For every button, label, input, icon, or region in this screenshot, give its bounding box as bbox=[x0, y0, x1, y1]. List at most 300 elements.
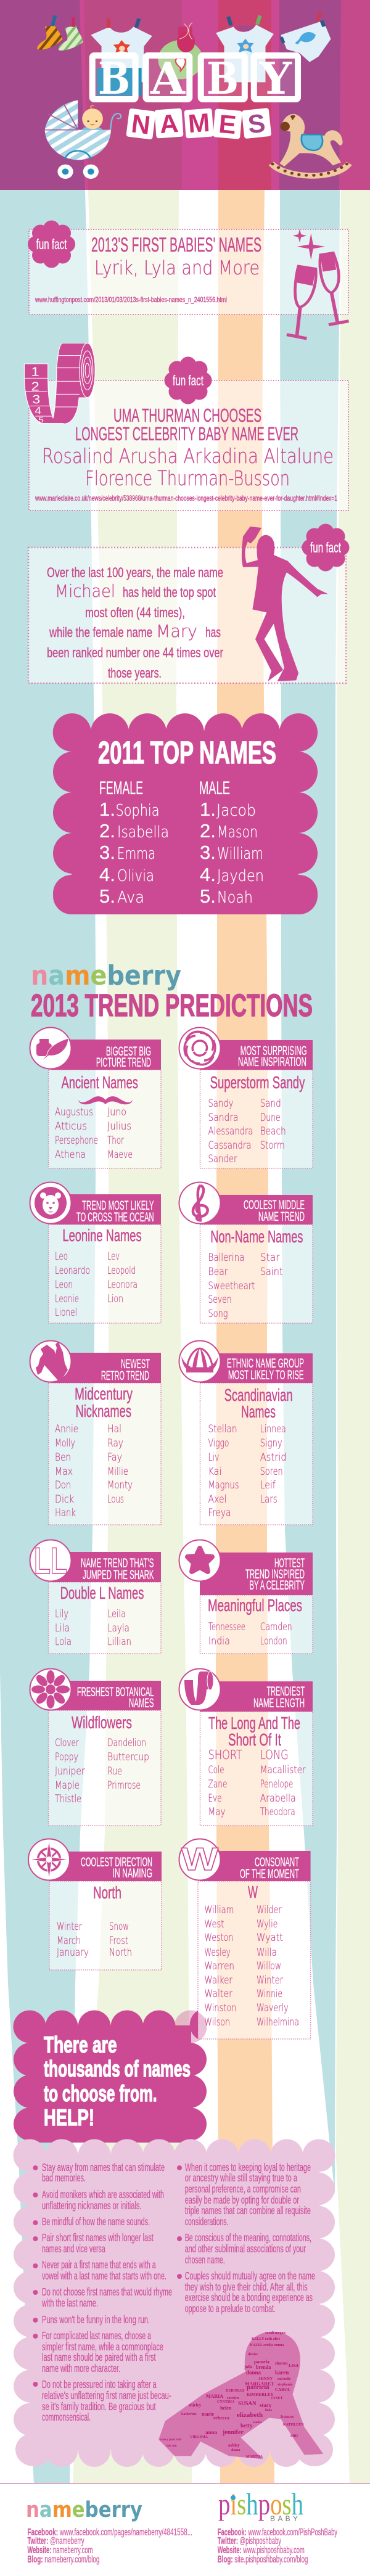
text: help message: There are bbox=[44, 2032, 117, 2057]
list: W names: Wilson bbox=[204, 2016, 230, 2028]
text: banner title: NAME INSPIRATION bbox=[238, 1055, 306, 1069]
heading: wildflowers: Wildflowers bbox=[72, 1713, 132, 1732]
list: non-name names bbox=[208, 1252, 283, 1320]
list: tips left column: last name should be paired with a first bbox=[42, 2351, 156, 2363]
list: leonine names: Leo bbox=[55, 1250, 68, 1263]
list: short and long names: Eve bbox=[208, 1792, 222, 1805]
list: midcentury names: Hal bbox=[107, 1423, 121, 1435]
text: banner title bbox=[96, 1044, 151, 1070]
icon: star bbox=[179, 1540, 221, 1581]
list: tips left column: vowel with a last name that starts with one. bbox=[42, 2270, 166, 2282]
icon: crawling baby word cloud bbox=[158, 2331, 323, 2459]
icon: crawling baby word cloud: julie bbox=[244, 2365, 252, 2369]
text: banner title: BY A CELEBRITY bbox=[249, 1578, 305, 1593]
panel: hottest trend inspired by a celebrity bbox=[179, 1540, 313, 1654]
list: leonine names: Leonardo bbox=[55, 1265, 90, 1277]
heading: scandinavian names bbox=[224, 1385, 293, 1421]
heading: meaningful places: Meaningful Places bbox=[208, 1596, 302, 1615]
text: name fact: most often (44 times), bbox=[85, 605, 185, 620]
icon: tape measure: 4 bbox=[35, 404, 41, 416]
panel: freshest botanical names bbox=[30, 1668, 161, 1826]
list: female names: Sophia bbox=[116, 802, 159, 820]
icon: crawling baby word cloud: sarah megan bbox=[265, 2331, 286, 2335]
list: double l names: Leila bbox=[107, 1608, 126, 1620]
icon: crawling baby word cloud: carolyn bbox=[227, 2397, 239, 2400]
panel: 2011 top names bbox=[53, 713, 318, 914]
list: short and long names: Theodora bbox=[260, 1806, 295, 1818]
panel: fun fact longest name bbox=[29, 356, 348, 511]
panel: help callout bbox=[14, 2010, 207, 2143]
text: banner title: RETRO TREND bbox=[101, 1369, 149, 1383]
heading: double l names: Double L Names bbox=[60, 1583, 144, 1602]
heading: 2011 top names: 2011 TOP NAMES bbox=[98, 735, 276, 770]
list: male names: 4. bbox=[200, 864, 216, 885]
list: tips right column: chosen name. bbox=[185, 2254, 225, 2266]
list: W names: Weston bbox=[204, 1932, 233, 1944]
icon: crawling baby word cloud: KIMBERLEY bbox=[247, 2392, 274, 2397]
icon: crawling baby word cloud: MARGARET bbox=[245, 2381, 274, 2387]
list: ancient names: Atticus bbox=[55, 1120, 87, 1133]
list: tips left column: names and vice versa bbox=[42, 2242, 105, 2255]
list: tips right column: considerations. bbox=[185, 2215, 228, 2228]
heading: ancient names: Ancient Names bbox=[62, 1073, 138, 1092]
list: scandinavian names: Signy bbox=[260, 1437, 282, 1450]
list: male names: 5. bbox=[200, 885, 216, 907]
list: W names: Walker bbox=[204, 1974, 232, 1987]
icon: crawling baby word cloud: patricia bbox=[247, 2384, 269, 2391]
icon: crawling baby word cloud: elizabeth bbox=[237, 2411, 263, 2419]
list: leonine names: Leon bbox=[55, 1279, 73, 1291]
list: male names: Jayden bbox=[217, 867, 264, 885]
list: W names: Walter bbox=[204, 1988, 232, 2000]
list: tips left column: Stay away from names that can stimulate bbox=[42, 2161, 165, 2173]
text: banner title: COOLEST MIDDLE bbox=[244, 1198, 305, 1212]
icon: horse and rider bbox=[30, 1340, 72, 1382]
text: nameberry links: Facebook: www.facebook.com/pages/nameberry/4841558... bbox=[27, 2527, 192, 2538]
text: banner title: FRESHEST BOTANICAL bbox=[77, 1685, 154, 1699]
list: midcentury names: Fay bbox=[107, 1451, 122, 1464]
text: banner title: COOLEST DIRECTION bbox=[81, 1855, 152, 1869]
text: nameberry links: Twitter: @nameberry bbox=[27, 2536, 84, 2546]
text: banner title: CONSONANT bbox=[255, 1855, 299, 1869]
list: double l names: Lila bbox=[55, 1622, 70, 1635]
list: tips left column: Puns won't be funny in the long run. bbox=[42, 2313, 150, 2326]
list: tips right column bbox=[177, 2161, 315, 2315]
list: scandinavian names: Liv bbox=[208, 1451, 220, 1464]
icon: crawling baby word cloud: linda bbox=[265, 2409, 272, 2412]
list: short and long names: Arabella bbox=[260, 1792, 296, 1805]
title: NAMES tiles: E bbox=[218, 109, 237, 139]
text: banner title bbox=[76, 1199, 154, 1224]
list: ancient names bbox=[55, 1106, 133, 1161]
text: banner title: PICTURE TREND bbox=[96, 1056, 151, 1070]
list: female names: Emma bbox=[117, 845, 155, 863]
list: female names: Olivia bbox=[117, 867, 154, 885]
icon: storm spiral bbox=[179, 1027, 221, 1069]
heading: leonine names: Leonine Names bbox=[62, 1226, 142, 1245]
list: midcentury names: Hank bbox=[55, 1507, 76, 1519]
heading: midcentury nicknames: Midcentury bbox=[75, 1384, 133, 1403]
icon: fun fact badge bbox=[164, 356, 212, 404]
list: ancient names: Maeve bbox=[107, 1149, 133, 1161]
list: midcentury names bbox=[55, 1423, 133, 1519]
list: scandinavian names: Axel bbox=[208, 1493, 227, 1506]
list: storm names bbox=[208, 1097, 286, 1165]
list: north names: Snow bbox=[109, 1921, 129, 1933]
text: help message: to choose from. bbox=[44, 2081, 157, 2106]
text: banner title: OF THE MOMENT bbox=[240, 1867, 299, 1881]
text: help message: HELP! bbox=[44, 2105, 94, 2130]
list: female names: FEMALE bbox=[99, 778, 143, 798]
icon: crawling baby word cloud: betty bbox=[240, 2422, 253, 2429]
list: leonine names: Lion bbox=[107, 1293, 123, 1305]
icon: lion bbox=[30, 1183, 72, 1223]
list: ancient names: Persephone bbox=[55, 1134, 98, 1147]
icon: t-shirts, bib and diaper bbox=[91, 12, 331, 96]
icon: tape measure: 5 bbox=[38, 416, 44, 425]
list: male names: Jacob bbox=[216, 802, 256, 820]
list: scandinavian names: Soren bbox=[260, 1466, 283, 1478]
list: tips left column: Be mindful of how the name sounds. bbox=[42, 2215, 150, 2228]
icon: letter W: W bbox=[181, 1842, 219, 1877]
list: place names: Camden bbox=[260, 1621, 292, 1633]
title: BABY blocks: Y bbox=[259, 52, 292, 104]
icon: crawling baby word cloud: nancy joan ruth bbox=[160, 2439, 181, 2442]
title: NAMES tiles: S bbox=[247, 109, 266, 139]
icon: crawling baby word cloud: denise bbox=[248, 2353, 258, 2357]
list: double l names: Lillian bbox=[107, 1636, 131, 1648]
title: NAMES tiles: M bbox=[187, 108, 211, 138]
list: place names: Tennessee bbox=[208, 1621, 245, 1633]
list: non-name names: Bear bbox=[208, 1266, 228, 1278]
list: tips right column: or ancestry while still staying true to a bbox=[185, 2172, 297, 2184]
list: tips left column: with the last name. bbox=[41, 2297, 98, 2309]
list: short and long names: Penelope bbox=[260, 1778, 293, 1790]
icon: crawling baby word cloud: katherine bbox=[181, 2413, 197, 2416]
text: banner title: TRENDIEST bbox=[266, 1684, 305, 1699]
list: scandinavian names: Kai bbox=[208, 1466, 222, 1478]
list: ancient names: Athena bbox=[55, 1149, 86, 1161]
icon: tape measure: 1 bbox=[31, 364, 39, 379]
text: banner title bbox=[227, 1356, 304, 1382]
list: scandinavian names: Freya bbox=[208, 1507, 231, 1519]
list: female names: 1. bbox=[99, 798, 115, 820]
list: tips left column: relative's unflattering first name just becau- bbox=[42, 2389, 171, 2402]
list: midcentury names: Annie bbox=[55, 1423, 78, 1435]
list: midcentury names: Don bbox=[55, 1479, 71, 1491]
icon: crawling baby word cloud: SUSAN bbox=[238, 2400, 257, 2406]
list: wildflower names: Clover bbox=[55, 1737, 79, 1749]
list: midcentury names: Max bbox=[55, 1466, 73, 1478]
title: BABY blocks: B bbox=[207, 52, 239, 104]
title: BABY blocks: B bbox=[98, 52, 130, 104]
heading: non-name names: Non-Name Names bbox=[210, 1227, 303, 1246]
heading: north: North bbox=[93, 1883, 121, 1902]
text: first babies names: Lyrik, Lyla and More bbox=[94, 257, 260, 279]
icon: crawling baby word cloud: lois ann bbox=[166, 2445, 177, 2448]
list: male names: MALE bbox=[199, 778, 230, 798]
list: non-name names: Star bbox=[260, 1252, 280, 1264]
list: ancient names: Julius bbox=[107, 1120, 131, 1133]
header illustrations bbox=[37, 12, 349, 179]
title: BABY blocks: A bbox=[150, 52, 186, 104]
list: leonine names: Leonora bbox=[107, 1279, 138, 1291]
list: scandinavian names: Linnea bbox=[260, 1423, 286, 1435]
panel: trend most likely to cross the ocean bbox=[30, 1183, 161, 1323]
list: W names: Wesley bbox=[204, 1946, 231, 1959]
list: short and long names bbox=[208, 1747, 306, 1818]
list: double l names: Layla bbox=[107, 1622, 130, 1635]
list: place names: London bbox=[260, 1635, 287, 1647]
list: W names: Willow bbox=[257, 1960, 281, 1972]
heading: long and short bbox=[208, 1713, 300, 1749]
list: storm names: Dune bbox=[260, 1112, 281, 1124]
text: pishposh links: Twitter: @pishposhbaby bbox=[218, 2536, 281, 2546]
list: non-name names: Song bbox=[208, 1308, 228, 1320]
list: leonine names bbox=[55, 1250, 138, 1319]
list: tips right column: easily be made by opting for double or bbox=[185, 2194, 299, 2206]
list: storm names: Sandra bbox=[208, 1112, 238, 1124]
icon: tape measure: 3 bbox=[32, 393, 40, 406]
list: W names: Wylie bbox=[257, 1918, 278, 1930]
list: scandinavian names: Lars bbox=[260, 1493, 278, 1506]
icon: double L: LL bbox=[34, 1540, 67, 1581]
icon: crawling baby word cloud: anna bbox=[205, 2429, 218, 2435]
icon: crawling baby word cloud: jennifer bbox=[222, 2429, 244, 2436]
list: leonine names: Leopold bbox=[107, 1265, 136, 1277]
text: name fact: has bbox=[205, 625, 221, 640]
icon: stroller bbox=[45, 100, 121, 179]
panel: naming tips bbox=[14, 2139, 335, 2467]
list: midcentury names: Millie bbox=[107, 1466, 128, 1478]
list: W names: Wilder bbox=[257, 1904, 282, 1916]
heading: uma thurman: UMA THURMAN CHOOSES bbox=[113, 404, 261, 426]
icon: crawling baby word cloud: MARTHA bbox=[246, 2455, 263, 2459]
text: help message bbox=[44, 2032, 191, 2130]
list: ancient names: Augustus bbox=[55, 1106, 93, 1118]
icon: crawling baby word cloud: marie bbox=[202, 2411, 214, 2417]
list: midcentury names: Molly bbox=[55, 1437, 75, 1450]
list: double l names: Lily bbox=[55, 1608, 68, 1620]
icon: fun fact badge: fun fact bbox=[310, 539, 341, 556]
list: tips left column: simpler first name, while a commonplace bbox=[42, 2340, 163, 2353]
panel: coolest direction in naming bbox=[28, 1839, 162, 1970]
list: leonine names: Lionel bbox=[55, 1306, 77, 1319]
logo: nameberry footer: nameberry bbox=[26, 2498, 142, 2522]
text: nameberry links: Blog: nameberry.com/blog bbox=[27, 2554, 99, 2565]
list: midcentury names: Monty bbox=[107, 1479, 133, 1491]
list: wildflower names: Thistle bbox=[55, 1793, 81, 1805]
text: nameberry links: Website: nameberry.com bbox=[27, 2545, 92, 2556]
panel: name trend that has jumped the shark bbox=[30, 1540, 161, 1654]
list: female names: 5. bbox=[99, 885, 115, 907]
panel: coolest middle name trend bbox=[179, 1183, 313, 1323]
logo: pishposh baby: BABY bbox=[270, 2514, 298, 2523]
list: female names: 2. bbox=[99, 820, 115, 842]
text: full name line two: Florence Thurman-Busson bbox=[85, 466, 290, 490]
heading: W: W bbox=[248, 1882, 258, 1901]
list: male names: Noah bbox=[217, 888, 253, 907]
list: wildflower names: Juniper bbox=[55, 1765, 85, 1778]
icon: socks bbox=[37, 15, 83, 51]
icon: crawling baby word cloud: KATHLEEN bbox=[283, 2423, 304, 2427]
list: non-name names: Sweetheart bbox=[208, 1280, 255, 1292]
title: BABY blocks bbox=[92, 52, 298, 104]
list: tips left column: name with more character. bbox=[42, 2362, 120, 2374]
list: storm names: Beach bbox=[260, 1125, 286, 1138]
text: source url: www.huffingtonpost.com/2013/01/03/2013s-first-babies-names_n_2401556.html bbox=[35, 295, 227, 304]
text: banner title: JUMPED THE SHARK bbox=[83, 1568, 154, 1582]
list: north names: Winter bbox=[57, 1921, 82, 1933]
list: male names: Mason bbox=[217, 823, 258, 842]
list: non-name names: Saint bbox=[260, 1266, 283, 1278]
icon: rocking horse bbox=[271, 114, 349, 177]
list: wildflower names: Maple bbox=[55, 1779, 80, 1792]
list: tips left column: se it's family tradition. Be gracious but bbox=[42, 2400, 156, 2413]
list: wildflower names: Rue bbox=[107, 1765, 122, 1778]
text: banner title: TO CROSS THE OCEAN bbox=[76, 1210, 154, 1224]
list: non-name names: Ballerina bbox=[208, 1252, 244, 1264]
title: NAMES tiles: N bbox=[130, 109, 152, 140]
list: storm names: Sander bbox=[208, 1153, 237, 1165]
icon: crawling baby word cloud: CYNTHIA bbox=[217, 2400, 235, 2404]
list: wildflower names: Primrose bbox=[107, 1779, 141, 1792]
list: scandinavian names: Viggo bbox=[208, 1437, 229, 1450]
text: pishposh links bbox=[218, 2527, 337, 2565]
icon: crawling baby word cloud: ashley bbox=[228, 2443, 240, 2448]
icon: crawling baby word cloud: JANET bbox=[271, 2397, 283, 2400]
list: scandinavian names: Stellan bbox=[208, 1423, 237, 1435]
icon: crawling baby word cloud: pamela bbox=[254, 2359, 269, 2365]
list: W names: Waverly bbox=[257, 2002, 289, 2014]
icon: crawling baby word cloud: frances bbox=[281, 2414, 294, 2419]
list: north names: March bbox=[57, 1935, 81, 1947]
icon: crawling baby word cloud: sandra bbox=[253, 2421, 262, 2424]
text: banner title: TREND MOST LIKELY bbox=[82, 1199, 154, 1213]
list: W names bbox=[204, 1904, 299, 2028]
icon: crawling baby word cloud: helen bbox=[220, 2405, 232, 2411]
header banner bbox=[0, 0, 370, 190]
heading: scandinavian names: Scandinavian bbox=[224, 1385, 293, 1405]
text: banner title: NEWEST bbox=[121, 1357, 150, 1371]
text: banner title: IN NAMING bbox=[112, 1866, 152, 1881]
panel: biggest big picture trend bbox=[30, 1027, 161, 1168]
list: wildflower names: Dandelion bbox=[107, 1737, 146, 1749]
list: tips left column: bad memories. bbox=[42, 2172, 86, 2184]
list: double l names: Lola bbox=[55, 1636, 72, 1648]
text: banner title: NAME TREND bbox=[258, 1210, 305, 1224]
text: name fact: Mary bbox=[156, 621, 197, 641]
panel: fun fact first babies bbox=[28, 221, 348, 314]
list: north names: North bbox=[109, 1946, 132, 1959]
list: W names: Winston bbox=[204, 2002, 236, 2014]
list: female names: Isabella bbox=[117, 823, 169, 842]
list: storm names: Storm bbox=[260, 1139, 285, 1152]
icon: crawling baby word cloud: rebecca bbox=[213, 2415, 229, 2421]
list: tips left column: Do not choose first names that would rhyme bbox=[42, 2286, 172, 2298]
text: banner title bbox=[81, 1855, 152, 1881]
text: pishposh links: Website: www.pishposhbaby.com bbox=[218, 2545, 305, 2556]
list: female names: Ava bbox=[117, 888, 144, 907]
list: leonine names: Leonie bbox=[55, 1293, 79, 1305]
list: male names: 2. bbox=[200, 820, 216, 842]
list: storm names: Cassandra bbox=[208, 1139, 252, 1152]
list: north names bbox=[57, 1921, 132, 1959]
icon: crawling baby word cloud: KELLY ruth alice bbox=[252, 2337, 281, 2341]
heading: midcentury nicknames: Nicknames bbox=[75, 1401, 131, 1421]
list: short and long names: LONG bbox=[260, 1747, 289, 1762]
list: wildflower names: Poppy bbox=[55, 1751, 78, 1763]
list: male names: 3. bbox=[200, 842, 216, 863]
panel: ethnic name group bbox=[179, 1340, 313, 1525]
icon: crawling baby word cloud: diana bbox=[231, 2448, 240, 2452]
text: banner title: BIGGEST BIG bbox=[106, 1044, 151, 1059]
list: tips right column: oppose to a prelude to combat. bbox=[185, 2302, 276, 2315]
list: storm names: Sand bbox=[260, 1097, 281, 1110]
list: tips left column: unflattering nicknames or initials. bbox=[42, 2199, 142, 2212]
icon: tape measure bbox=[24, 343, 95, 425]
list: midcentury names: Ray bbox=[107, 1437, 123, 1450]
list: non-name names: Seven bbox=[208, 1294, 232, 1306]
footer band bbox=[0, 2483, 370, 2576]
icon: ink and feather bbox=[30, 1027, 72, 1069]
list: north names: Frost bbox=[109, 1935, 128, 1947]
list: wildflower names bbox=[55, 1737, 149, 1805]
logo: pishposh baby: pishposh bbox=[218, 2487, 303, 2521]
icon: fun fact badge bbox=[302, 524, 349, 571]
list: midcentury names: Lous bbox=[107, 1493, 124, 1506]
text: banner title bbox=[101, 1357, 150, 1383]
heading: midcentury nicknames bbox=[75, 1384, 133, 1421]
icon: crawling baby word cloud: DEBORAH bbox=[226, 2389, 245, 2393]
icon: crawling baby word cloud: stephanie bbox=[278, 2383, 293, 2387]
list: male names: William bbox=[217, 845, 263, 863]
list: W names: William bbox=[204, 1904, 234, 1916]
list: tips left column bbox=[33, 2161, 172, 2423]
icon: small tape measure bbox=[179, 1668, 221, 1710]
title: NAMES tiles bbox=[126, 107, 271, 140]
icon: crawling baby word cloud: karen bbox=[275, 2369, 289, 2376]
icon: crawling baby word cloud: shirley bbox=[189, 2403, 202, 2408]
text: banner title: NAME TREND THAT'S bbox=[81, 1556, 154, 1570]
list: tips right column: personal preference, a compromise can bbox=[185, 2183, 301, 2195]
list: double l names bbox=[55, 1608, 131, 1648]
list: short and long names: SHORT bbox=[208, 1747, 242, 1762]
list: male names bbox=[199, 778, 264, 907]
list: W names: West bbox=[204, 1918, 224, 1930]
list: short and long names: May bbox=[208, 1806, 226, 1818]
icon: champagne glasses bbox=[287, 229, 349, 338]
panel: fun fact michael and mary bbox=[28, 524, 349, 683]
text: banner title: HOTTEST bbox=[274, 1556, 305, 1570]
panel: newest retro trend bbox=[30, 1340, 161, 1525]
list: north names: January bbox=[57, 1946, 89, 1959]
list: tips left column: commonsensical. bbox=[42, 2411, 91, 2423]
heading: first babies: 2013'S FIRST BABIES' NAMES bbox=[91, 234, 261, 256]
icon: crawling baby word cloud: brenda bbox=[256, 2365, 271, 2370]
logo: nameberry: nameberry bbox=[31, 960, 181, 991]
list: W names: Warren bbox=[204, 1960, 234, 1972]
list: midcentury names: Dick bbox=[55, 1493, 74, 1506]
list: ancient names: Thor bbox=[107, 1134, 124, 1147]
icon: letter W bbox=[179, 1839, 221, 1881]
text: banner title bbox=[77, 1685, 154, 1710]
list: midcentury names: Ben bbox=[55, 1451, 71, 1464]
text: banner title: MOST LIKELY TO RISE bbox=[228, 1368, 303, 1382]
icon: viking helmet bbox=[179, 1340, 221, 1382]
text: banner title bbox=[238, 1044, 307, 1069]
icon: dancing figure bbox=[242, 527, 328, 681]
